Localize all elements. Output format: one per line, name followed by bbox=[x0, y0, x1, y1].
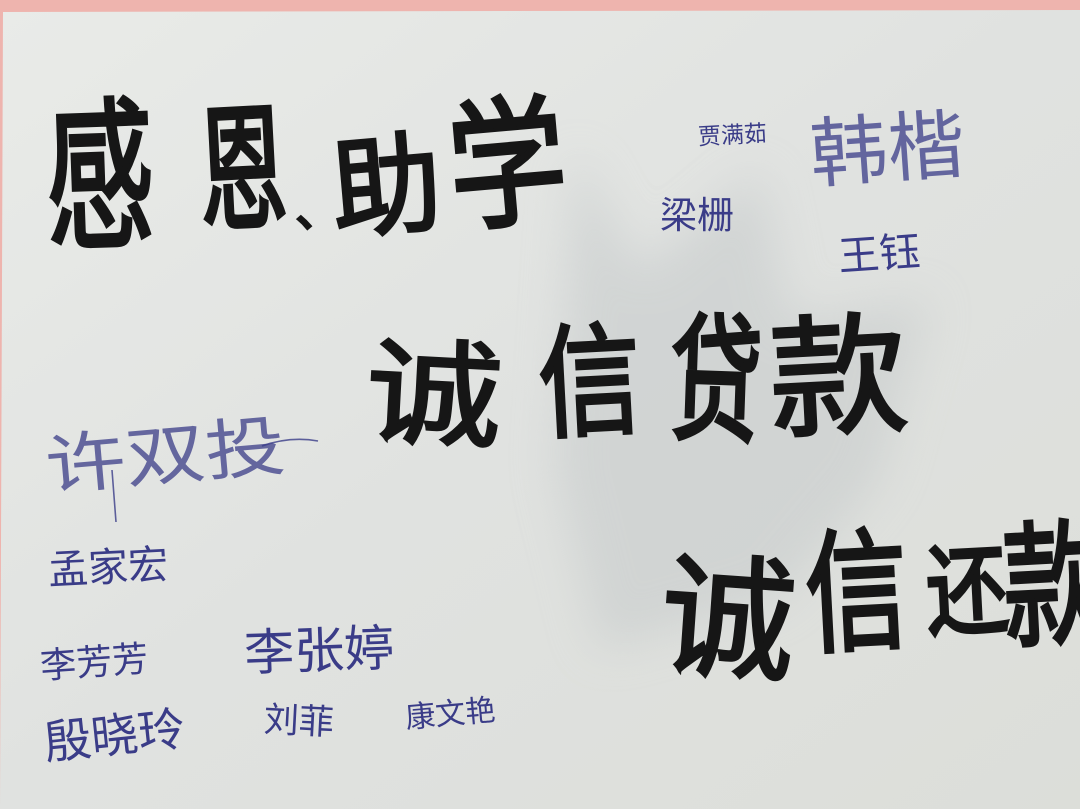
slogan: 诚信贷款: 信 bbox=[535, 312, 644, 454]
heading: 感恩助学: 助 bbox=[326, 122, 447, 254]
signature: 李芳芳: 李芳芳 bbox=[39, 638, 149, 686]
signature: 许双投 bbox=[43, 409, 318, 522]
signature: 梁栅: 梁栅 bbox=[660, 195, 734, 236]
signature: 贾满茹: 贾满茹 bbox=[697, 120, 768, 150]
signature: 王钰: 王钰 bbox=[837, 228, 922, 280]
slogan: 诚信还款: 还 bbox=[923, 536, 1011, 650]
slogan: 诚信贷款: 款 bbox=[766, 301, 911, 455]
slogan: 诚信贷款 bbox=[363, 301, 911, 464]
signature: 刘菲: 刘菲 bbox=[263, 700, 335, 743]
signature: 孟家宏: 孟家宏 bbox=[47, 543, 169, 593]
heading: 感恩助学: 学 bbox=[442, 82, 573, 250]
slogan: 诚信还款: 信 bbox=[802, 518, 911, 671]
signatures: lower left bbox=[39, 409, 497, 769]
slogan: 诚信还款: 诚 bbox=[656, 542, 800, 700]
slogan: 诚信贷款: 诚 bbox=[363, 328, 505, 464]
signature: 殷晓玲: 殷晓玲 bbox=[42, 702, 187, 769]
heading: 感恩助学: 恩 bbox=[195, 93, 290, 250]
slogan: 诚信贷款: 贷 bbox=[667, 303, 764, 461]
signature: 李张婷: 李张婷 bbox=[243, 620, 395, 681]
slogan: 诚信还款 bbox=[656, 509, 1080, 700]
hand shadow on paper bbox=[555, 150, 930, 650]
signature: 许双投: 许双投 bbox=[43, 409, 288, 503]
heading: 感恩助学: 、 bbox=[296, 188, 338, 235]
signature: 韩楷: 韩楷 bbox=[807, 103, 968, 198]
heading: 感恩助学 bbox=[43, 82, 573, 271]
heading: 感恩助学: 感 bbox=[43, 86, 157, 271]
signature: 康文艳: 康文艳 bbox=[404, 694, 497, 735]
signatures: upper right bbox=[660, 103, 968, 280]
